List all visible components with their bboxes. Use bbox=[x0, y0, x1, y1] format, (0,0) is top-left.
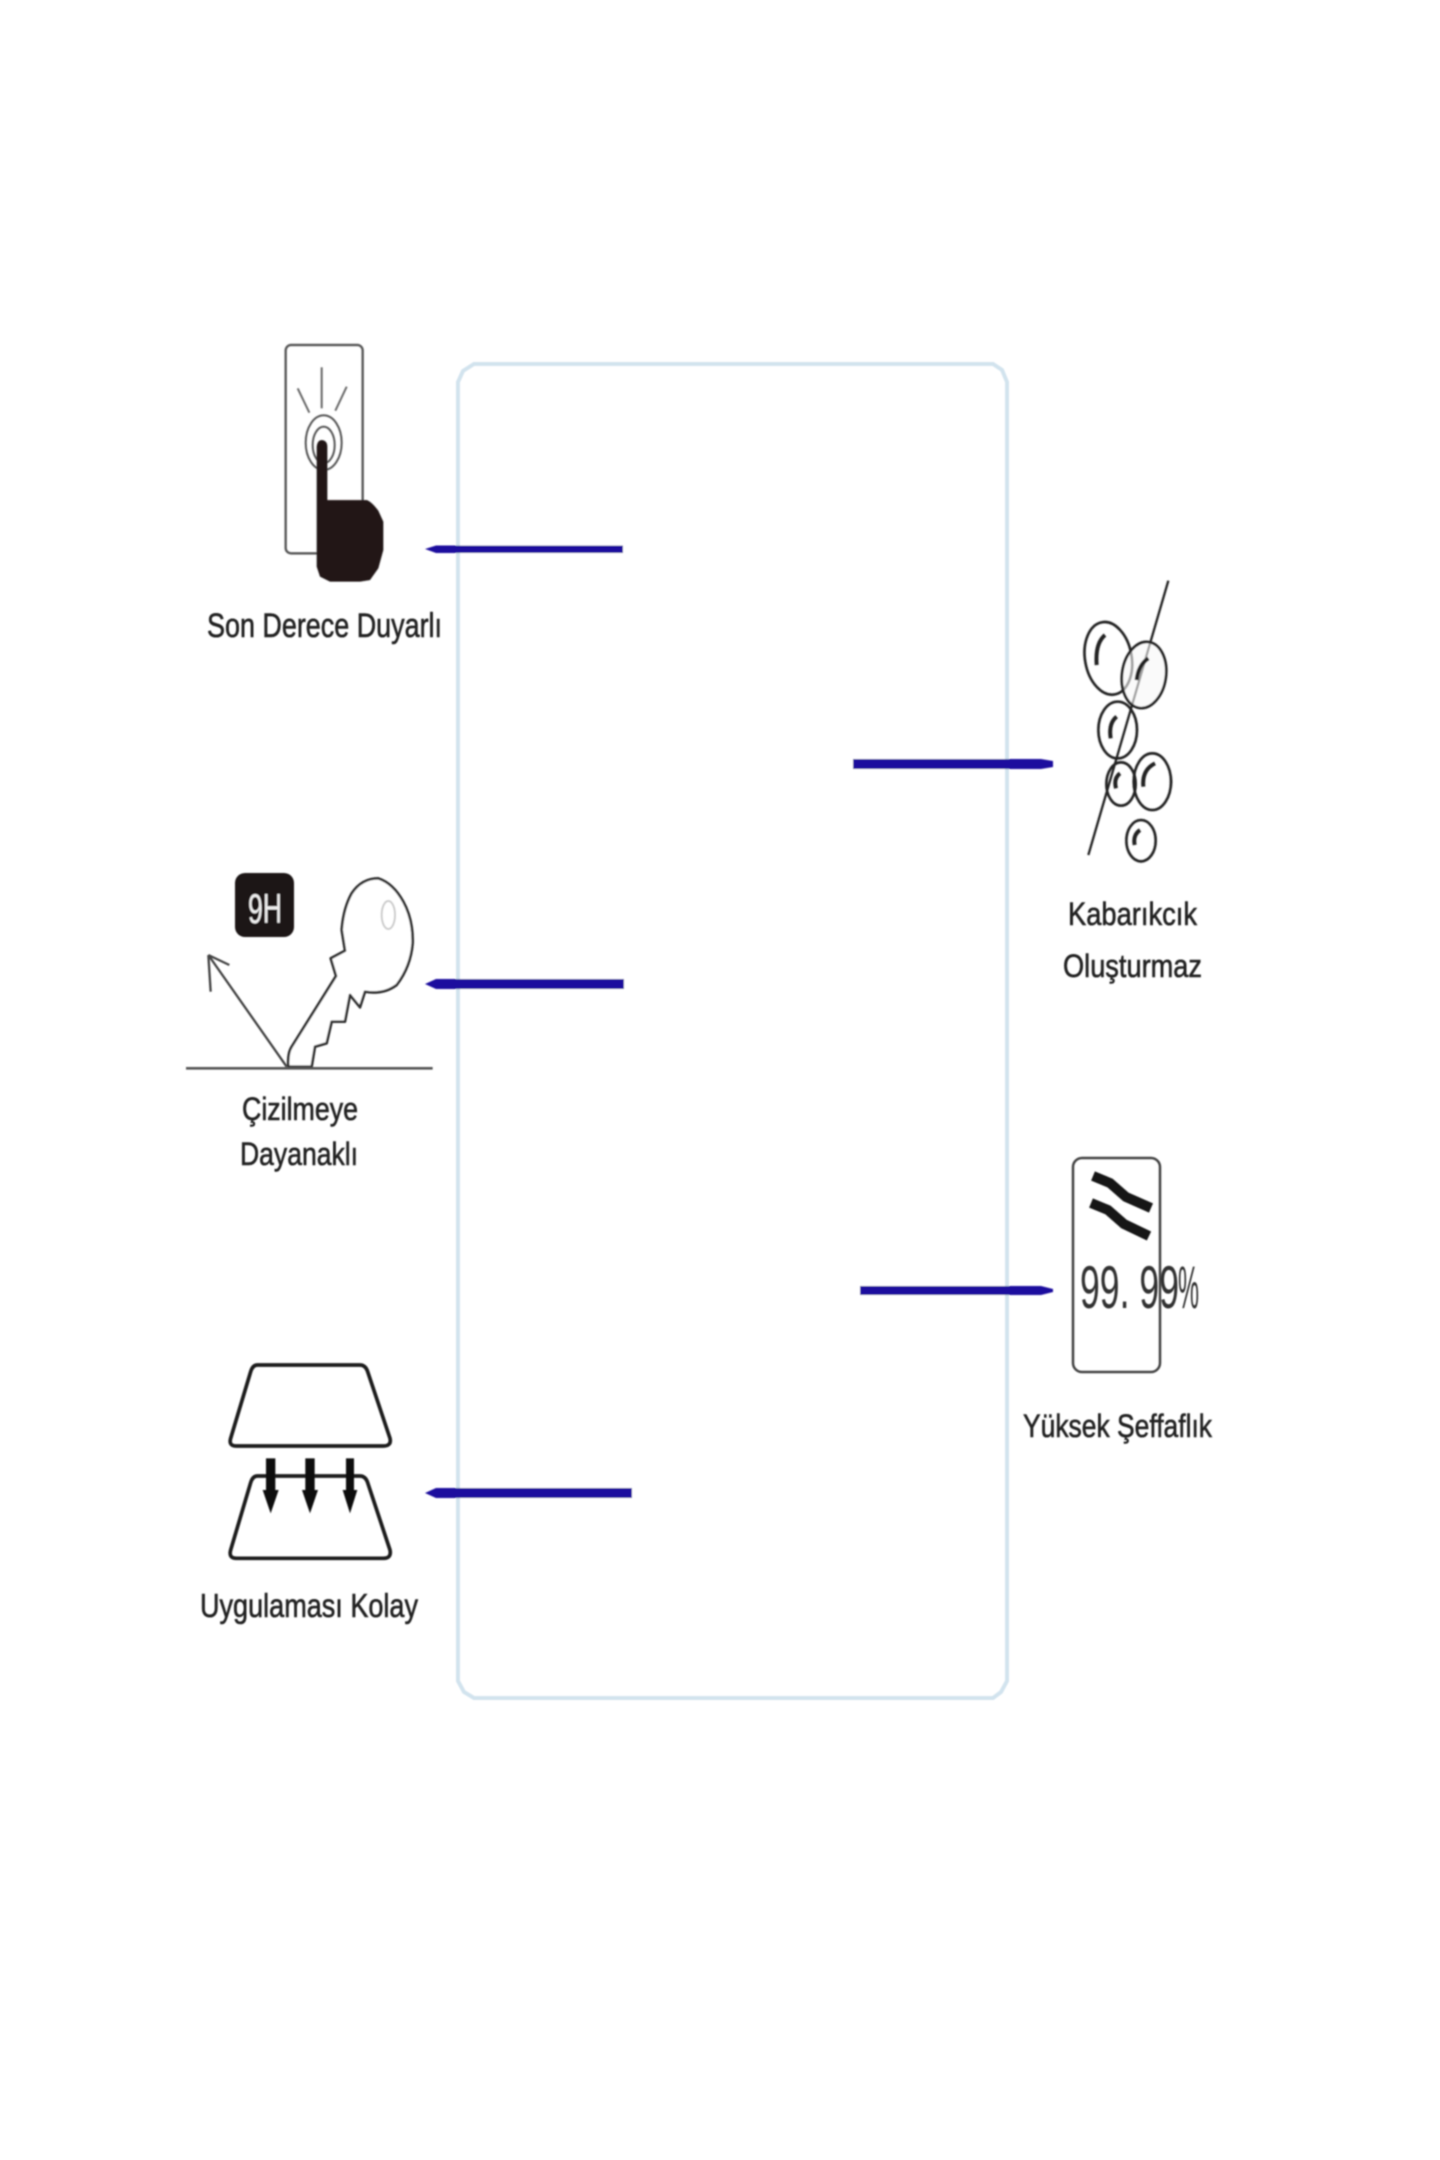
connector line 5 bbox=[860, 1286, 1053, 1295]
feature: Kabarıkcık Oluşturmaz bbox=[1063, 581, 1202, 984]
icon: two panels with arrows bbox=[230, 1365, 390, 1558]
label: Oluşturmaz: Oluşturmaz bbox=[1063, 948, 1202, 984]
feature: Yüksek Şeffaflık bbox=[1023, 1158, 1213, 1444]
label: Uygulaması Kolay: Uygulaması Kolay bbox=[200, 1587, 418, 1624]
label: Son Derece Duyarlı: Son Derece Duyarlı bbox=[207, 607, 442, 645]
icon: transparency card bbox=[1073, 1158, 1199, 1372]
feature: Son Derece Duyarlı bbox=[207, 345, 442, 645]
icon: transparency card: 99. 99 bbox=[1080, 1254, 1179, 1321]
icon: 9H badge bbox=[235, 873, 294, 937]
label: Yüksek Şeffaflık: Yüksek Şeffaflık bbox=[1023, 1408, 1213, 1444]
label: Dayanaklı: Dayanaklı bbox=[240, 1136, 358, 1172]
icon: touch finger bbox=[286, 345, 383, 582]
feature: Uygulaması Kolay bbox=[200, 1365, 418, 1624]
label: Kabarıkcık: Kabarıkcık bbox=[1068, 896, 1198, 932]
icon: key scratching surface bbox=[186, 878, 433, 1068]
label: Çizilmeye: Çizilmeye bbox=[242, 1091, 358, 1127]
icon: 9H badge: 9H bbox=[248, 885, 282, 932]
icon: bubbles bbox=[1079, 581, 1171, 861]
connector line 4 bbox=[853, 759, 1053, 769]
feature: Yüksek Şeffaflık: % bbox=[1178, 1254, 1199, 1321]
connector line 2 bbox=[425, 979, 624, 989]
connector line 1 bbox=[425, 546, 623, 553]
connector line 3 bbox=[425, 1488, 632, 1498]
feature: Çizilmeye Dayanaklı bbox=[186, 873, 433, 1172]
panel: device outline bbox=[458, 364, 1007, 1698]
